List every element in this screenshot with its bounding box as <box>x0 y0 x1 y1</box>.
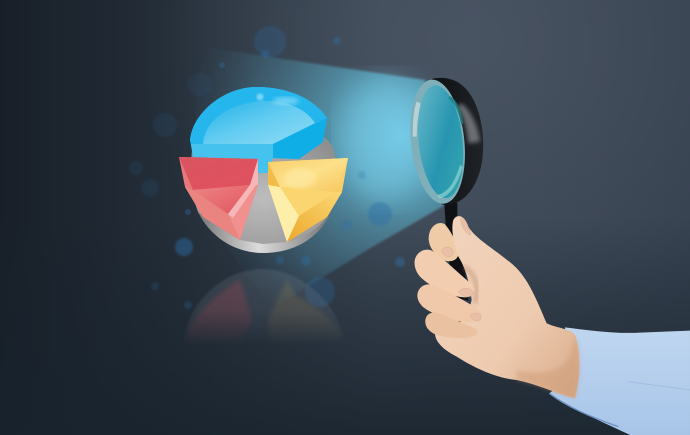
base lip <box>198 208 333 253</box>
palm and thumb <box>435 216 579 398</box>
lens <box>405 77 471 206</box>
frame <box>432 78 483 205</box>
light beam from the lens <box>195 45 445 310</box>
yellow slice <box>268 158 348 242</box>
bokeh particles <box>129 26 405 309</box>
shirt sleeve <box>549 327 690 435</box>
hand holding the handle <box>415 216 579 398</box>
red slice <box>179 157 258 240</box>
handle <box>444 203 468 301</box>
magnifying glass <box>405 77 483 301</box>
shadow between thumb and fingers <box>463 267 477 303</box>
second finger <box>415 250 474 297</box>
shaded palm edge <box>517 335 579 398</box>
blue slice <box>190 87 327 173</box>
finger nails <box>442 218 481 321</box>
third finger <box>417 284 482 323</box>
index finger behind handle <box>429 223 458 261</box>
pie chart <box>179 87 348 253</box>
frame highlight <box>457 103 480 143</box>
little finger <box>425 312 477 338</box>
pie chart reflection <box>186 269 340 340</box>
gray centre slice <box>191 121 336 250</box>
